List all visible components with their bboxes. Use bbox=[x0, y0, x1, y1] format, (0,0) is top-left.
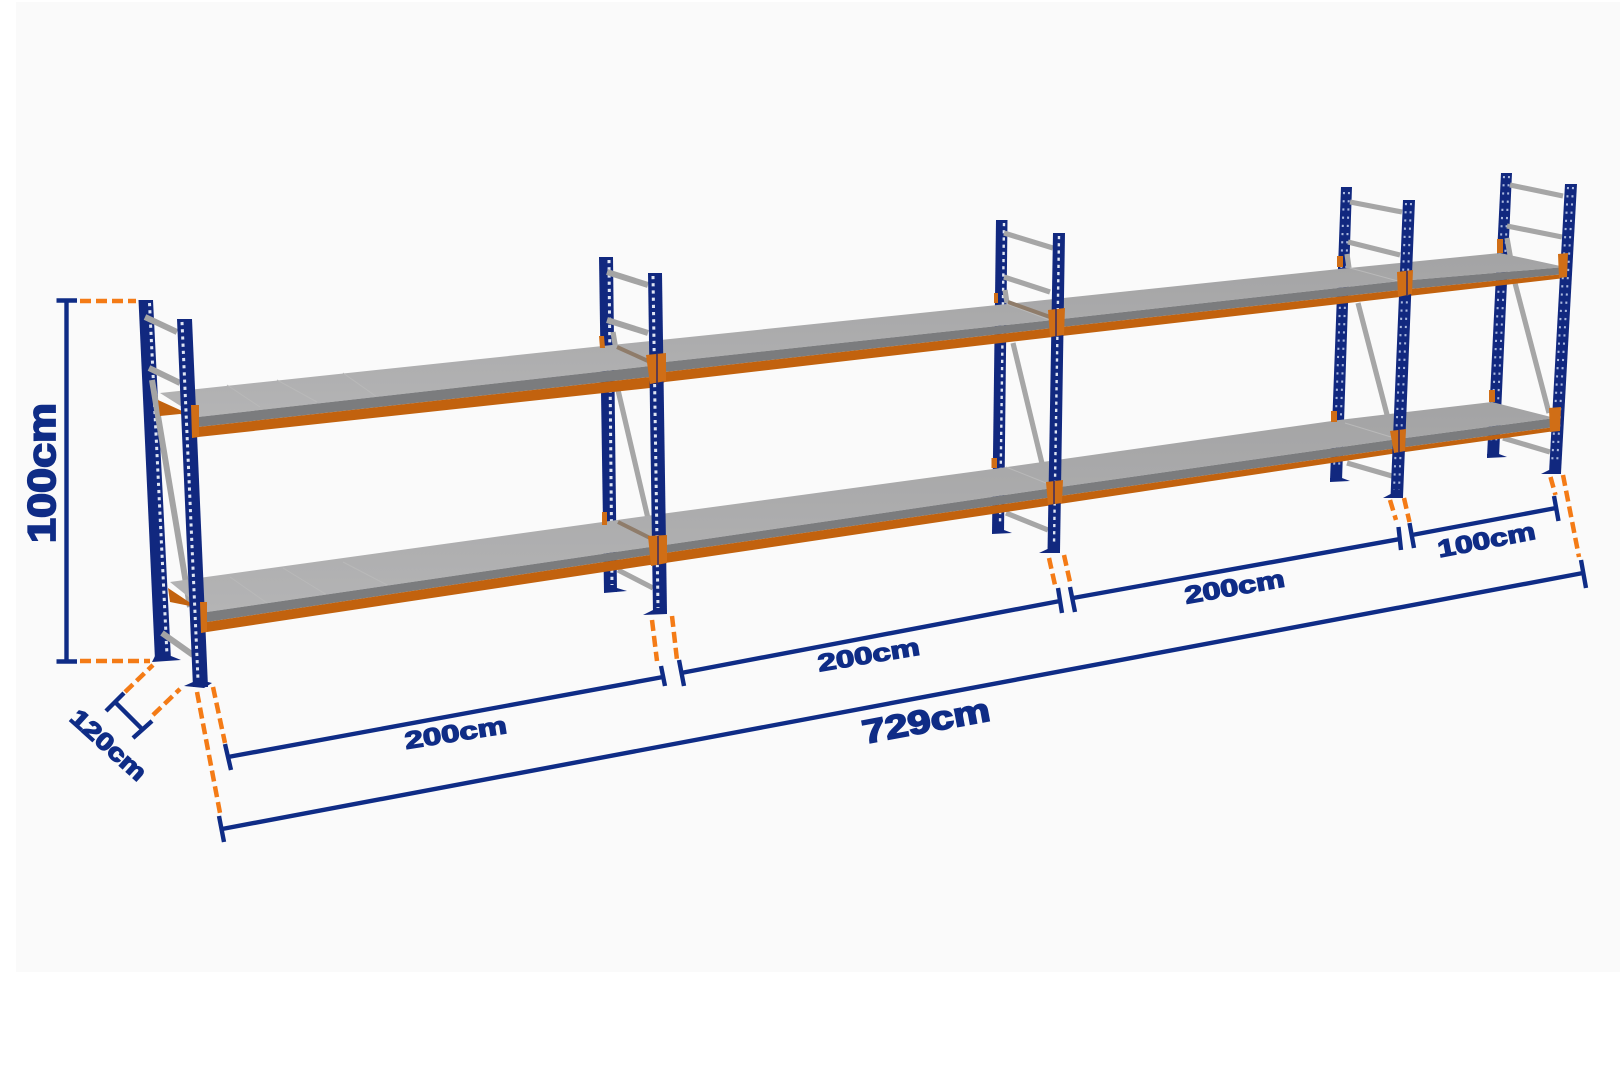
upright: frame D front bbox=[1383, 200, 1415, 498]
braces: frame D bbox=[1347, 202, 1402, 476]
upright: frame B front bbox=[643, 273, 667, 615]
dimension line bbox=[225, 666, 665, 770]
braces: frame E bbox=[1503, 185, 1563, 452]
label: 100cm bbox=[1435, 518, 1538, 563]
front brackets bbox=[191, 253, 1568, 633]
shelf panel seams bbox=[227, 268, 1398, 407]
extension dashes bbox=[125, 665, 180, 715]
shelf orange beam bbox=[207, 427, 1555, 632]
dimension line bbox=[219, 560, 1586, 842]
braces: frame C bbox=[1004, 233, 1053, 530]
dimension line bbox=[106, 693, 152, 738]
dimension line bbox=[1410, 496, 1558, 548]
upright: frame A rear bbox=[138, 300, 181, 662]
upright: frame A front bbox=[177, 319, 212, 688]
shelf front face bbox=[207, 418, 1555, 622]
upright: frame C rear bbox=[992, 220, 1012, 534]
braces: frame B bbox=[607, 272, 653, 588]
label: 100cm bbox=[21, 403, 64, 543]
extension dashes bbox=[197, 475, 1579, 813]
label: 200cm bbox=[816, 634, 922, 677]
dimension line bbox=[679, 588, 1062, 686]
shelf top surface bbox=[160, 253, 1565, 417]
upright: frame E front bbox=[1541, 184, 1577, 474]
upright: frame E rear bbox=[1487, 173, 1512, 458]
label: 200cm bbox=[403, 712, 509, 755]
side rails and diagonal braces bbox=[145, 185, 1563, 655]
upright: frame C front bbox=[1039, 233, 1065, 553]
dimension line bbox=[56, 300, 77, 662]
shelf front face bbox=[198, 267, 1565, 427]
side rails under shelf bbox=[617, 302, 1050, 361]
shelf end beam bbox=[168, 588, 207, 614]
extension dashes bbox=[213, 616, 677, 743]
upper shelf bbox=[158, 253, 1565, 437]
label: 120cm bbox=[64, 704, 152, 787]
width dimension: bay 2, 200cm bbox=[679, 588, 1062, 686]
front uprights bbox=[177, 184, 1577, 688]
label: 729cm bbox=[859, 691, 993, 751]
upright: frame D rear bbox=[1330, 187, 1352, 482]
shelf end beam bbox=[158, 400, 198, 420]
shelf panel seams bbox=[230, 423, 1391, 603]
dimension line bbox=[1070, 527, 1401, 612]
depth dimension: 120cm bbox=[64, 665, 180, 787]
rear brackets bbox=[599, 239, 1503, 525]
width dimension: bay 1, 200cm bbox=[213, 616, 677, 770]
upright: frame B rear bbox=[599, 257, 627, 593]
label: 200cm bbox=[1183, 566, 1287, 610]
rear uprights bbox=[138, 173, 1512, 662]
lower shelf bbox=[168, 402, 1555, 632]
side rail above shelf bbox=[618, 522, 650, 538]
width dimension: bay 3, 200cm bbox=[1049, 498, 1410, 612]
braces: frame A bbox=[145, 317, 193, 655]
extension dashes bbox=[1550, 477, 1556, 495]
width dimension: bay 4, 100cm bbox=[1410, 477, 1558, 563]
shelf orange beam bbox=[198, 274, 1565, 437]
bracket joint lines bbox=[657, 271, 1407, 565]
extension dashes bbox=[1049, 498, 1410, 585]
total width dimension: 729cm bbox=[197, 475, 1586, 842]
extension dashes bbox=[80, 301, 150, 661]
height dimension: 100cm bbox=[21, 300, 150, 662]
shelf top surface bbox=[170, 402, 1555, 612]
